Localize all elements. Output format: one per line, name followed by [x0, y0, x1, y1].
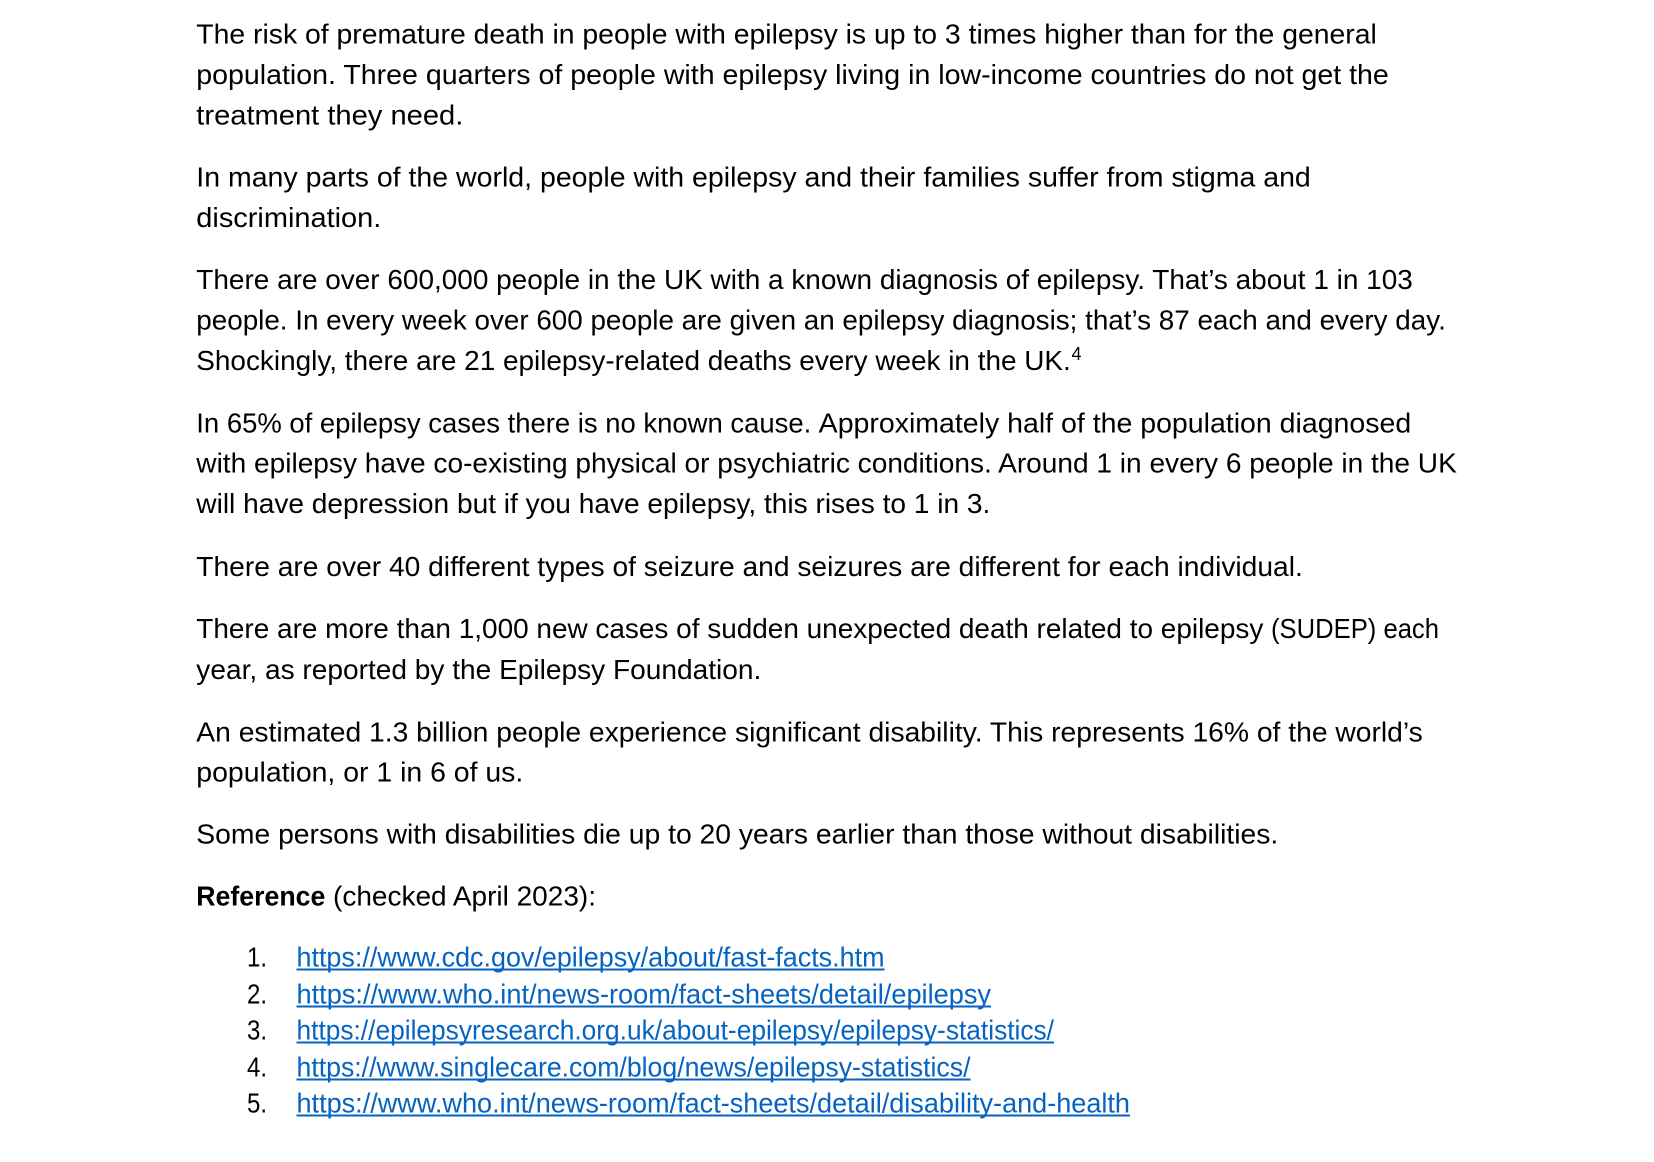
- text block: premature death risk: population. Three quarters of people with epilepsy living in low-income countries do not get the: [196, 59, 1389, 90]
- text block: UK diagnosis statistics: 4: [1072, 344, 1082, 364]
- text block: UK diagnosis statistics: people. In every week over 600 people are given an epilepsy diagnosis; that’s 87 each and every day.: [196, 304, 1446, 336]
- text block: premature death risk: [196, 18, 1389, 130]
- text block: causes and co-existing conditions: [195, 408, 1457, 519]
- text block: SUDEP cases: year, as reported by the Epilepsy Foundation.: [196, 654, 761, 685]
- reference list: [247, 942, 1130, 1118]
- text block: global disability: population, or 1 in 6 of us.: [196, 756, 523, 788]
- reference 2: 2.: [247, 978, 267, 1010]
- reference 4: https://www.singlecare.com/blog/news/epilepsy-statistics/: [296, 1052, 971, 1082]
- heading: reference: Reference: [196, 880, 325, 912]
- text block: earlier death with disabilities: Some persons with disabilities die up to 20 years earlier than those without disabilities.: [196, 818, 1278, 850]
- heading: reference: [196, 880, 596, 912]
- text block: SUDEP cases: (SUDEP) each: [1271, 613, 1439, 644]
- text block: global disability: An estimated 1.3 billion people experience significant disability. This represents 16% of the world’s: [196, 716, 1423, 748]
- text block: causes and co-existing conditions: with epilepsy have co-existing physical or psychiatric conditions. Around 1 in every 6 people in the UK: [195, 448, 1457, 478]
- reference 4: 4.: [247, 1052, 267, 1082]
- reference 3: 3.: [247, 1014, 267, 1046]
- text block: UK diagnosis statistics: Shockingly, there are 21 epilepsy-related deaths every week in the UK.: [196, 345, 1071, 376]
- text block: premature death risk: The risk of premature death in people with epilepsy is up to 3 times higher than for the general: [196, 18, 1377, 50]
- text block: stigma and discrimination: [196, 162, 1311, 233]
- text block: premature death risk: treatment they need.: [196, 100, 463, 130]
- text block: causes and co-existing conditions: In 65% of epilepsy cases there is no known cause.: [196, 408, 811, 438]
- heading: reference: (checked April 2023):: [333, 880, 596, 912]
- text block: seizure types: There are over 40 different types of seizure and seizures are different for each individual.: [196, 551, 1303, 582]
- text block: UK diagnosis statistics: There are over 600,000 people in the UK with a known diagnosis of epilepsy. That’s about 1 in 103: [196, 264, 1413, 295]
- reference 1: https://www.cdc.gov/epilepsy/about/fast-facts.htm: [296, 942, 884, 972]
- reference 1: 1.: [247, 942, 267, 972]
- text block: SUDEP cases: [196, 613, 1439, 685]
- reference 2: https://www.who.int/news-room/fact-sheets/detail/epilepsy: [296, 978, 991, 1010]
- text block: causes and co-existing conditions: will have depression but if you have epilepsy, this rises to 1 in 3.: [195, 488, 990, 519]
- text block: global disability: [196, 716, 1423, 788]
- text block: stigma and discrimination: In many parts of the world, people with epilepsy and their families suffer from stigma and: [196, 162, 1311, 192]
- reference 5: https://www.who.int/news-room/fact-sheets/detail/disability-and-health: [296, 1088, 1130, 1118]
- text block: stigma and discrimination: discrimination.: [196, 202, 381, 233]
- reference 3: https://epilepsyresearch.org.uk/about-epilepsy/epilepsy-statistics/: [296, 1014, 1054, 1046]
- text block: UK diagnosis statistics: [196, 264, 1446, 376]
- reference 5: 5.: [247, 1088, 267, 1118]
- text block: SUDEP cases: There are more than 1,000 new cases of sudden unexpected death related to epilepsy: [196, 613, 1264, 644]
- text block: causes and co-existing conditions: Approximately half of the population diagnosed: [819, 408, 1411, 438]
